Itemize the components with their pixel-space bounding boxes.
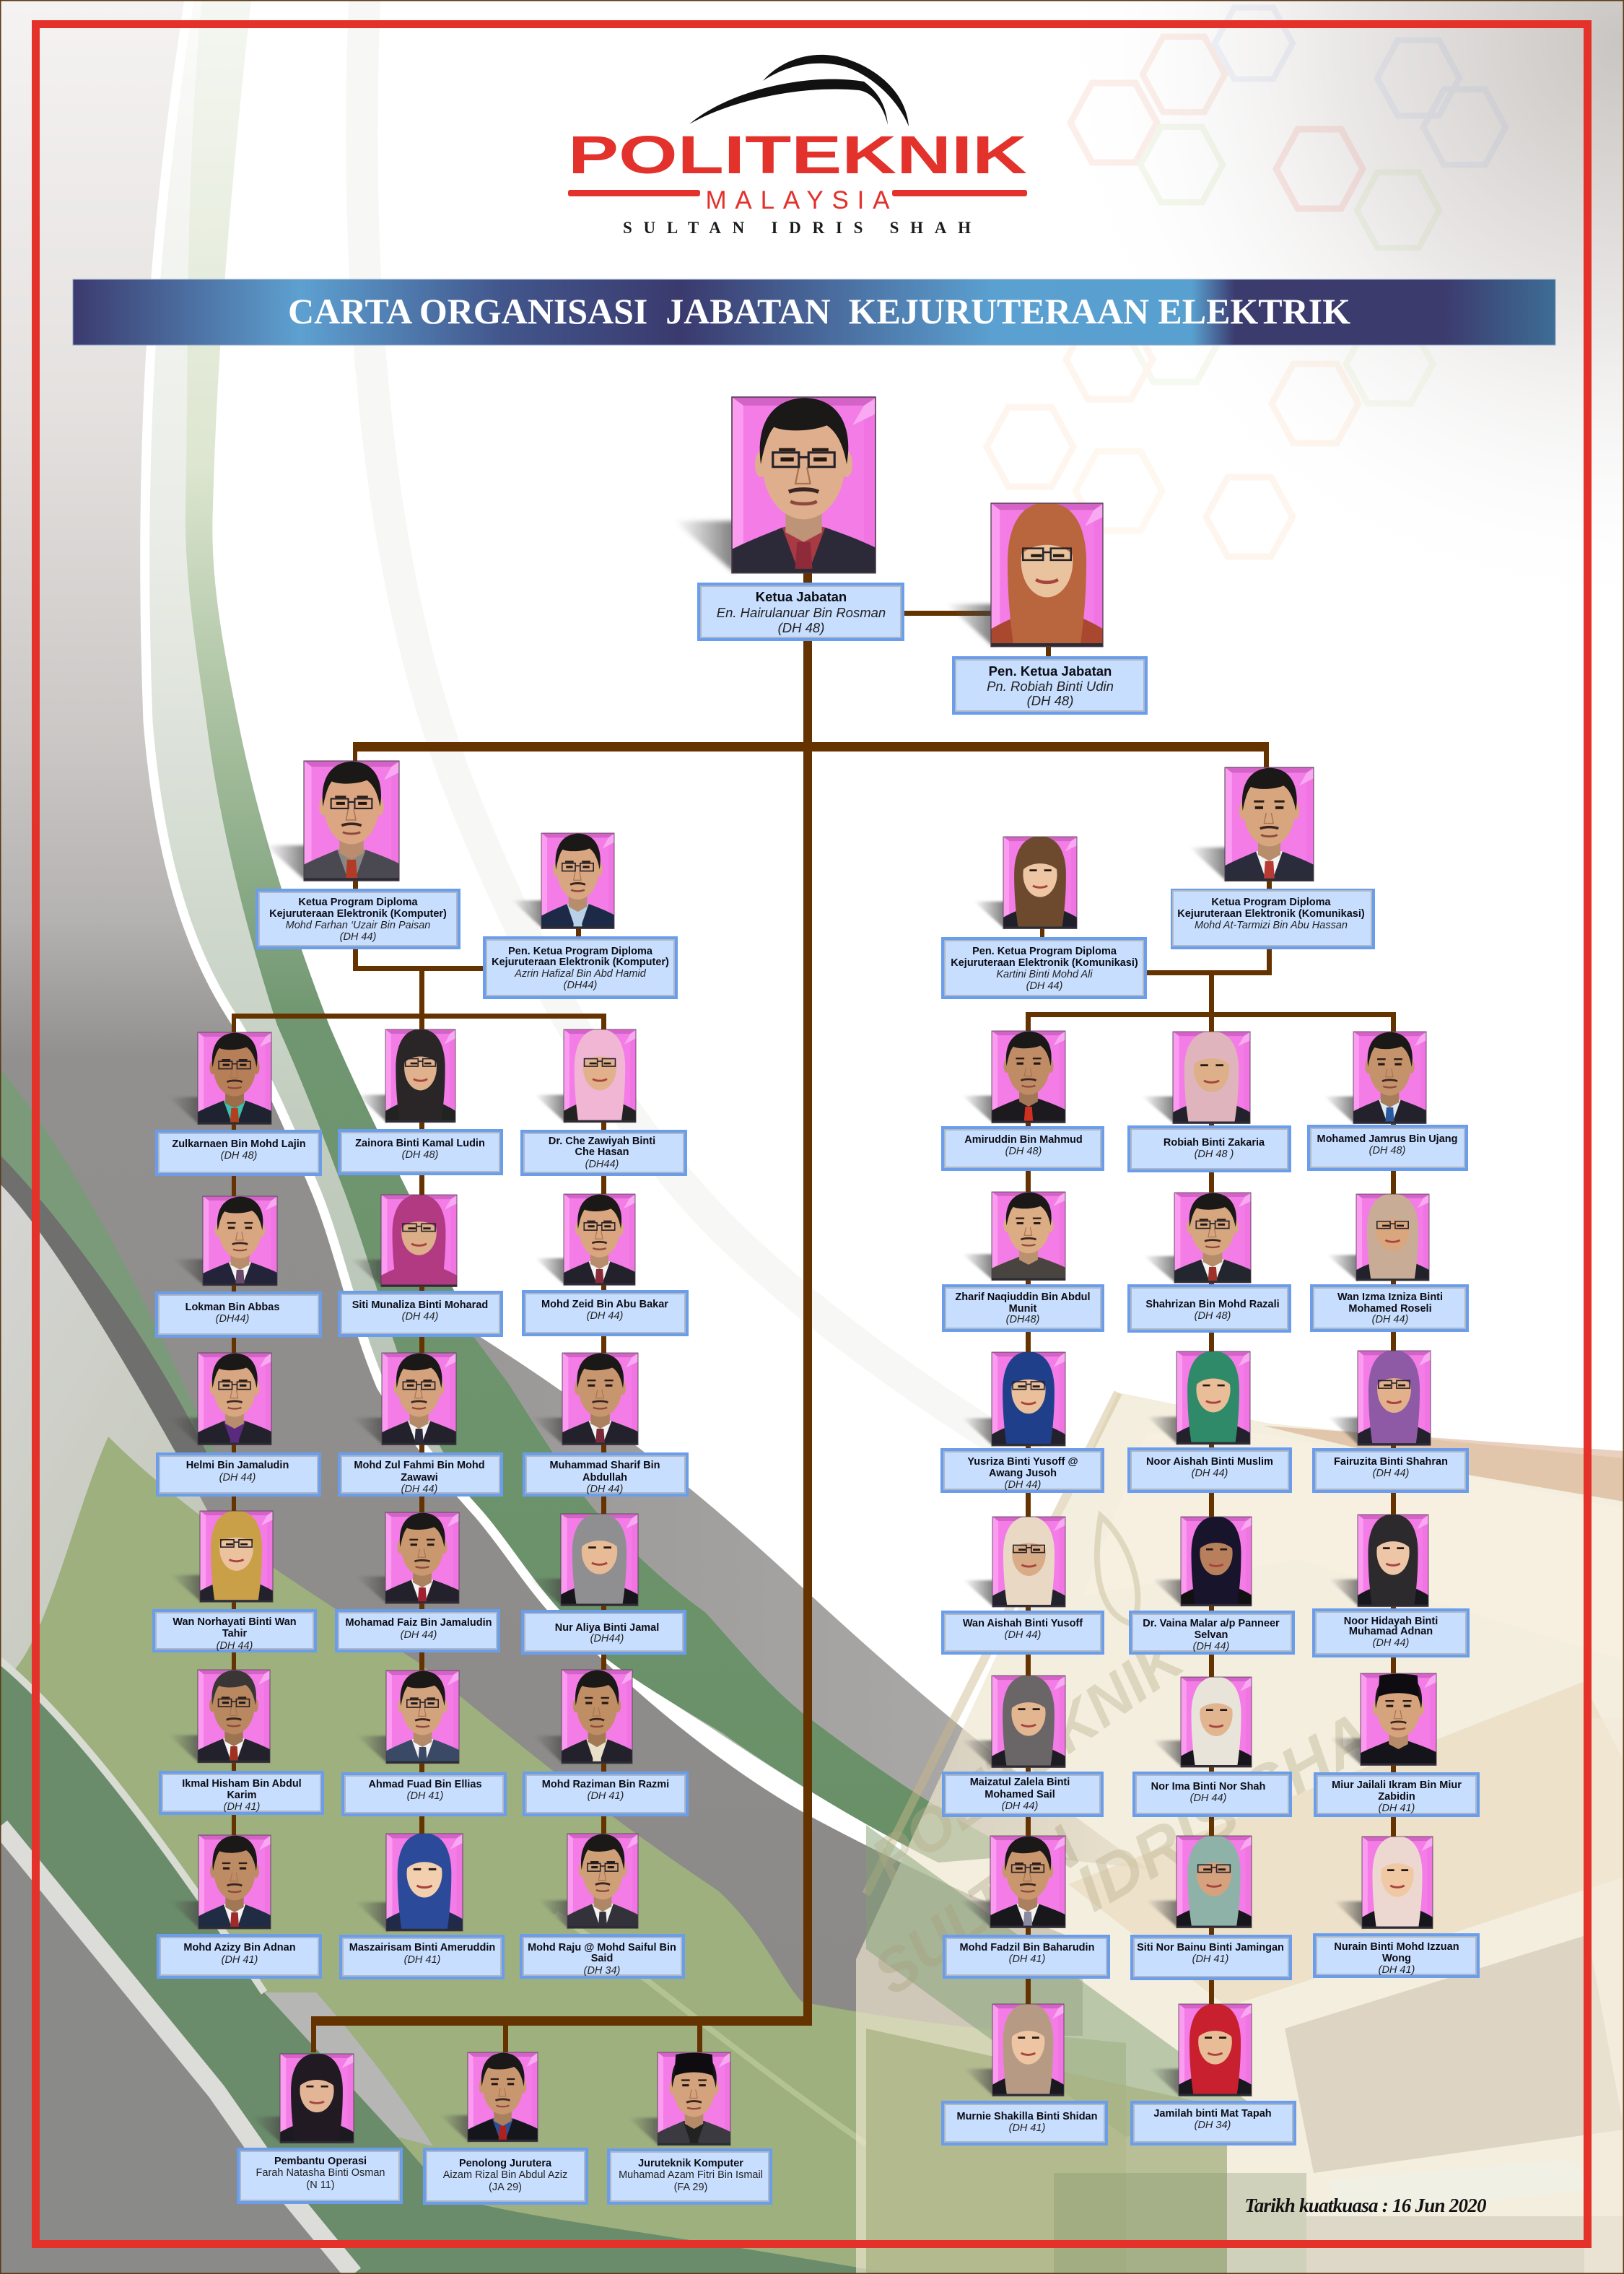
- name box: [1314, 1772, 1480, 1817]
- name box: Zharif Naqiuddin Bin Abdul: [955, 1291, 1091, 1303]
- name box: (DH 41): [1192, 1953, 1228, 1965]
- name box: Awang Jusoh: [989, 1468, 1057, 1479]
- card: Pembantu Operasi: [237, 2054, 403, 2204]
- name box: Ahmad Fuad Bin Ellias: [368, 1779, 482, 1790]
- card: Fairuzita: [1312, 1350, 1469, 1493]
- card: Juruteknik Komputer: [607, 2052, 772, 2205]
- name box: (DH 44): [1005, 1479, 1041, 1491]
- name box: (DH 44): [401, 1629, 437, 1641]
- photo: [169, 1670, 276, 1769]
- name box: (DH 41): [588, 1790, 624, 1802]
- name box: (DH 44): [1192, 1468, 1228, 1479]
- name box: Jamilah binti Mat Tapah: [1153, 2108, 1272, 2120]
- name box: Yusriza Binti Yusoff @: [967, 1456, 1078, 1468]
- name box: Abdullah: [582, 1472, 627, 1484]
- photo: [250, 2054, 357, 2148]
- card: Mohd Zeid: [522, 1194, 689, 1336]
- card: Shahrizan: [1127, 1193, 1291, 1333]
- name box: Nurain Binti Mohd Izzuan: [1334, 1941, 1459, 1953]
- name box: Muhamad Azam Fitri Bin Ismail: [619, 2169, 763, 2181]
- name box: Amiruddin Bin Mahmud: [964, 1134, 1083, 1146]
- name box: Siti Nor Bainu Binti Jamingan: [1137, 1942, 1284, 1953]
- name box: Muhammad Sharif Bin: [549, 1460, 660, 1471]
- photo: [1153, 1517, 1255, 1611]
- name box: Maizatul Zalela Binti: [970, 1777, 1070, 1788]
- name box: Zabidin: [1378, 1791, 1415, 1803]
- name box: Pen. Ketua Program Komunikasi: (DH 44): [1026, 980, 1062, 992]
- name box: [940, 1448, 1104, 1493]
- name box: Mohd Zeid Bin Abu Bakar: [541, 1299, 668, 1310]
- name box: [523, 1452, 689, 1497]
- card: Lokman: [155, 1196, 322, 1338]
- name box: (DH 48): [1369, 1145, 1405, 1156]
- card: Siti Nor Bainu: [1130, 1835, 1292, 1980]
- photo: [1146, 1835, 1255, 1933]
- photo: [168, 1032, 277, 1131]
- card: Muhammad Sharif: [523, 1353, 689, 1497]
- card: Maizatul: [942, 1675, 1104, 1817]
- name box: [1127, 1447, 1292, 1493]
- name box: [1313, 1933, 1480, 1978]
- name box: Noor Hidayah Binti: [1344, 1616, 1438, 1627]
- card: Vaina Malar: [1129, 1517, 1295, 1655]
- name box: (DH 41): [1009, 1953, 1045, 1965]
- name box: [1129, 1611, 1295, 1655]
- name box: Mohd Raju @ Mohd Saiful Bin: [528, 1942, 676, 1953]
- name box: (DH 41): [224, 1801, 260, 1813]
- card: Pen. Ketua Jabatan: [946, 502, 1148, 715]
- name box: [1310, 1284, 1469, 1332]
- photo: Hairulanuar: [674, 397, 886, 585]
- name box: (DH 41): [1379, 1803, 1415, 1814]
- title banner: CARTA ORGANISASI JABATAN KEJURUTERAAN ELEKTRIK: [288, 291, 1350, 331]
- name box: (DH 48): [402, 1149, 438, 1161]
- name box: Ketua Program Komputer: Ketua Program Diploma: [298, 897, 419, 908]
- name box: Helmi Bin Jamaludin: [186, 1460, 289, 1471]
- name box: [1127, 1125, 1291, 1172]
- name box: Pen. Ketua Program Komputer: [483, 936, 678, 999]
- card: Nur Aliya: [521, 1513, 686, 1655]
- name box: (DH44): [590, 1633, 624, 1644]
- name box: [521, 1610, 686, 1655]
- name box: Miur Jailali Ikram Bin Miur: [1332, 1779, 1462, 1791]
- name box: Pen. Ketua Program Komunikasi: Pen. Ketua Program Diploma: [972, 946, 1117, 957]
- photo: [1329, 1350, 1434, 1450]
- name box: Pen. Ketua Program Komputer: Azrin Hafizal Bin Abd Hamid: [514, 968, 647, 980]
- name box: [1130, 2101, 1296, 2146]
- logo: Politeknik Malaysia Sultan Idris Shah: SULTAN IDRIS SHAH: [623, 219, 971, 237]
- name box: (DH 44): [1193, 1641, 1229, 1652]
- name box: (DH 44): [1373, 1468, 1409, 1479]
- title banner: [73, 279, 1555, 345]
- name box: Pen. Ketua Program Komunikasi: Kartini Binti Mohd Ali: [996, 969, 1093, 980]
- name box: [423, 2148, 588, 2205]
- name box: [159, 1771, 324, 1815]
- photo: [168, 1353, 277, 1452]
- photo: [1324, 1032, 1432, 1131]
- photo: [357, 1670, 465, 1770]
- logo: Politeknik Malaysia Sultan Idris Shah: MALAYSIA: [706, 186, 890, 214]
- name box: (DH 44): [217, 1640, 253, 1652]
- name box: (DH 41): [404, 1954, 440, 1966]
- name box: (DH 48 ): [1195, 1149, 1234, 1160]
- name box: Mohamed Jamrus Bin Ujang: [1317, 1133, 1457, 1145]
- name box: Ketua Jabatan: En. Hairulanuar Bin Rosman: [717, 605, 886, 620]
- name box: Ketua Program Komputer: Mohd Farhan ‘Uzair Bin Paisan: [286, 920, 430, 931]
- name box: Fairuzita Binti Shahran: [1334, 1456, 1448, 1468]
- name box: [1132, 1772, 1292, 1817]
- photo: [962, 1675, 1069, 1772]
- name box: [943, 1935, 1110, 1979]
- photo: [173, 1196, 283, 1292]
- name box: [1312, 1448, 1469, 1493]
- name box: [942, 1772, 1104, 1817]
- card: Nurain: [1313, 1836, 1480, 1978]
- photo: [535, 1029, 639, 1127]
- name box: Wan Aishah Binti Yusoff: [963, 1618, 1083, 1629]
- name box: Lokman Bin Abbas: [185, 1302, 279, 1313]
- card: Pen. Ketua Program Komunikasi: [941, 836, 1147, 999]
- photo: Mohd At-Tarmizi: [1189, 767, 1320, 889]
- faint building sign text: POLITEKNIK: [859, 1621, 1199, 1894]
- name box: Nur Aliya Binti Jamal: [555, 1622, 659, 1634]
- photo: [1150, 2003, 1255, 2101]
- name box: Ketua Program Komputer: (DH 44): [340, 931, 376, 943]
- photo: Mohd Farhan: [266, 761, 406, 889]
- name box: Ketua Program Komunikasi: Kejuruteraan Elektronik (Komunikasi): [1177, 908, 1365, 920]
- name box: [941, 2101, 1108, 2146]
- name box: [335, 1609, 500, 1652]
- name box: [942, 1284, 1104, 1332]
- name box: Pen. Ketua Jabatan: Pen. Ketua Jabatan: [989, 663, 1112, 679]
- name box: Pen. Ketua Program Komputer: (DH44): [564, 980, 597, 991]
- name box: [341, 1772, 507, 1816]
- name box: Karim: [227, 1790, 257, 1801]
- photo: [1153, 1676, 1255, 1772]
- name box: Ketua Jabatan: (DH 48): [778, 620, 824, 635]
- card: Ketua Jabatan: [674, 397, 904, 641]
- name box: Farah Natasha Binti Osman: [256, 2167, 385, 2179]
- faint building sign text: SULTAN: [861, 1813, 1093, 2008]
- name box: Pen. Ketua Program Komputer: Pen. Ketua Program Diploma: [508, 946, 653, 957]
- card: Ahmad Fuad: [341, 1670, 507, 1816]
- card: Miur Jailali: [1314, 1673, 1480, 1817]
- name box: [157, 1934, 322, 1979]
- photo: [1147, 1351, 1254, 1449]
- name box: [523, 1772, 689, 1816]
- photo: [962, 1031, 1071, 1130]
- name box: Pembantu Operasi: [274, 2156, 367, 2167]
- photo: [170, 1835, 276, 1935]
- name box: Muhamad Adnan: [1349, 1626, 1433, 1637]
- name box: Mohd Azizy Bin Adnan: [183, 1942, 296, 1953]
- logo: Politeknik Malaysia Sultan Idris Shah: [568, 55, 1027, 237]
- name box: (DH 44): [401, 1484, 437, 1495]
- name box: Ketua Program Komputer: Kejuruteraan Elektronik (Komputer): [269, 908, 447, 920]
- name box: Pen. Ketua Jabatan: (DH 48): [1027, 693, 1073, 708]
- photo: Kartini: [974, 836, 1081, 933]
- card: Mohd Azizy: [157, 1835, 322, 1979]
- card: Yusriza: [940, 1351, 1104, 1493]
- logo: Politeknik Malaysia Sultan Idris Shah: POLITEKNIK: [568, 125, 1027, 185]
- card: Ketua Program Komputer: [256, 761, 460, 949]
- name box: Wan Izma Izniza Binti: [1337, 1291, 1443, 1303]
- name box: Zawawi: [401, 1472, 438, 1484]
- card: Wan Izma: [1310, 1194, 1469, 1332]
- card: Mohamad Faiz: [335, 1512, 500, 1652]
- card: Mohd Raju: [520, 1834, 685, 1979]
- card: Zulkarnaen: [155, 1032, 322, 1176]
- name box: [1312, 1608, 1470, 1657]
- name box: Ketua Program Komunikasi: [1171, 889, 1375, 949]
- faint building sign text: [859, 1621, 1427, 2008]
- photo: [629, 2052, 736, 2152]
- name box: [237, 2148, 403, 2204]
- name box: Che Hasan: [575, 1146, 629, 1158]
- name box: [520, 1934, 685, 1979]
- card: Siti Munaliza: [338, 1194, 503, 1337]
- card: Murnie: [941, 2003, 1108, 2146]
- card: Noor Hidayah: [1312, 1514, 1470, 1657]
- name box: [941, 1611, 1104, 1655]
- name box: (DH 48): [221, 1150, 257, 1162]
- card: Noor Aishah: [1127, 1351, 1292, 1493]
- card: Zainora: [338, 1029, 503, 1175]
- photo: Azrin Hafizal: [512, 833, 620, 936]
- card: Penolong Jurutera: [423, 2052, 588, 2205]
- name box: Dr. Vaina Malar a/p Panneer: [1143, 1618, 1280, 1629]
- name box: Mohd Raziman Bin Razmi: [542, 1779, 669, 1790]
- name box: Murnie Shakilla Binti Shidan: [957, 2111, 1097, 2122]
- name box: Mohamed Roseli: [1348, 1303, 1432, 1315]
- name box: Wong: [1382, 1953, 1411, 1964]
- name box: Robiah Binti Zakaria: [1164, 1137, 1265, 1149]
- photo: [171, 1510, 276, 1607]
- name box: Ketua Program Komunikasi: Mohd At-Tarmizi Bin Abu Hassan: [1195, 920, 1348, 931]
- name box: Ikmal Hisham Bin Abdul: [182, 1778, 302, 1790]
- name box: (DH 44): [1005, 1629, 1041, 1641]
- name box: (DH 44): [1373, 1637, 1409, 1649]
- name box: Pen. Ketua Program Komputer: Kejuruteraan Elektronik (Komputer): [492, 957, 669, 968]
- card: Nor Ima: [1132, 1676, 1292, 1817]
- name box: Wan Norhayati Binti Wan: [173, 1616, 297, 1628]
- photo: [1334, 1836, 1436, 1933]
- card: Che Zawiyah: [520, 1029, 687, 1176]
- photo: [530, 1513, 642, 1611]
- name box: [1307, 1125, 1468, 1171]
- card: Ikmal Hisham: [159, 1670, 324, 1815]
- name box: Zainora Binti Kamal Ludin: [355, 1138, 485, 1149]
- name box: Siti Munaliza Binti Moharad: [352, 1299, 488, 1311]
- name box: [522, 1290, 689, 1336]
- photo: [1330, 1673, 1442, 1772]
- connector lines: [232, 570, 1396, 2053]
- name box: Ketua Jabatan: [697, 583, 904, 641]
- name box: Pen. Ketua Program Komunikasi: Kejuruteraan Elektronik (Komunikasi): [951, 957, 1138, 969]
- name box: Ketua Jabatan: Ketua Jabatan: [756, 589, 847, 604]
- card: Mohd Raziman: [523, 1670, 689, 1816]
- name box: (DH 48): [1195, 1310, 1231, 1322]
- photo: [356, 1512, 465, 1610]
- name box: (FA 29): [674, 2182, 707, 2193]
- name box: Ketua Program Komunikasi: Ketua Program Diploma: [1211, 897, 1332, 908]
- photo: [539, 1834, 643, 1935]
- effective date: Tarikh kuatkuasa : 16 Jun 2020: [1244, 2195, 1487, 2216]
- card: Ketua Program Komunikasi: [1171, 767, 1375, 949]
- name box: Mohamed Sail: [985, 1789, 1055, 1800]
- name box: (DH 44): [587, 1310, 623, 1322]
- photo: [1144, 1193, 1257, 1289]
- name box: (DH 44): [1372, 1314, 1408, 1325]
- card: Jamilah: [1130, 2003, 1296, 2146]
- name box: (DH48): [1006, 1314, 1039, 1325]
- photo: [357, 1029, 459, 1127]
- name box: Mohd Zul Fahmi Bin Mohd: [354, 1460, 485, 1471]
- name box: (DH44): [585, 1159, 619, 1170]
- card: Wan Norhayati: [152, 1510, 317, 1652]
- photo: [535, 1194, 640, 1291]
- card: Mohd Fadzil: [943, 1836, 1110, 1979]
- name box: [338, 1129, 503, 1175]
- name box: (JA 29): [489, 2182, 522, 2193]
- photo: [960, 1836, 1071, 1935]
- name box: Maszairisam Binti Ameruddin: [349, 1942, 495, 1953]
- name box: [339, 1935, 505, 1979]
- name box: [155, 1291, 322, 1338]
- photo: [1142, 1031, 1254, 1128]
- name box: (DH 34): [1195, 2120, 1231, 2131]
- name box: [1127, 1284, 1291, 1333]
- name box: (DH 44): [1002, 1800, 1038, 1812]
- name box: Pen. Ketua Program Komunikasi: [941, 937, 1147, 999]
- name box: [156, 1452, 321, 1497]
- name box: Mohamad Faiz Bin Jamaludin: [345, 1617, 492, 1629]
- name box: (N 11): [306, 2179, 335, 2191]
- name box: [155, 1130, 322, 1176]
- name box: Mohd Fadzil Bin Baharudin: [960, 1942, 1094, 1953]
- card: Mohamed Jamrus: [1307, 1032, 1468, 1171]
- name box: (DH 44): [587, 1484, 623, 1495]
- name box: (DH 44): [219, 1472, 256, 1484]
- photo: [356, 1833, 466, 1936]
- name box: [941, 1126, 1104, 1171]
- name box: [338, 1291, 503, 1337]
- photo: [962, 1192, 1071, 1286]
- name box: [338, 1452, 503, 1497]
- photo: [1330, 1514, 1432, 1611]
- name box: (DH44): [216, 1313, 249, 1325]
- name box: Tahir: [222, 1628, 248, 1639]
- card: Amiruddin: [941, 1031, 1104, 1171]
- photo: [440, 2052, 543, 2148]
- name box: Ketua Program Komputer: [256, 889, 460, 949]
- card: Zharif: [942, 1192, 1104, 1332]
- card: Robiah Zakaria: [1127, 1031, 1291, 1172]
- name box: (DH 41): [1379, 1964, 1415, 1976]
- card: Pen. Ketua Program Komputer: [483, 833, 678, 999]
- photo: [962, 1351, 1069, 1451]
- name box: (DH 41): [407, 1790, 443, 1802]
- name box: (DH 44): [402, 1311, 438, 1323]
- card: Mohd Zul Fahmi: [338, 1353, 503, 1497]
- name box: (DH 41): [1009, 2122, 1045, 2134]
- name box: Dr. Che Zawiyah Binti: [549, 1136, 655, 1147]
- photo: [964, 1516, 1069, 1611]
- name box: Said: [591, 1953, 613, 1964]
- name box: (DH 41): [222, 1954, 258, 1966]
- photo: [1327, 1194, 1433, 1285]
- card: Maszairisam: [339, 1833, 505, 1979]
- name box: [152, 1609, 317, 1652]
- name box: Selvan: [1195, 1629, 1228, 1641]
- name box: Juruteknik Komputer: [638, 2158, 743, 2169]
- photo: [964, 2003, 1068, 2101]
- name box: Pen. Ketua Jabatan: Pn. Robiah Binti Udin: [987, 679, 1114, 694]
- card: Wan Aishah: [941, 1516, 1104, 1655]
- card: Helmi: [156, 1353, 321, 1497]
- photo: [352, 1353, 462, 1452]
- name box: Noor Aishah Binti Muslim: [1146, 1456, 1273, 1468]
- photo: [351, 1194, 460, 1291]
- name box: Munit: [1009, 1303, 1036, 1315]
- name box: [520, 1130, 687, 1176]
- name box: [607, 2148, 772, 2205]
- name box: Pen. Ketua Jabatan: [952, 656, 1148, 715]
- name box: Penolong Jurutera: [459, 2158, 552, 2169]
- name box: Shahrizan Bin Mohd Razali: [1145, 1299, 1280, 1310]
- background hexagon pattern: [987, 7, 1506, 557]
- name box: [1130, 1935, 1292, 1980]
- name box: Zulkarnaen Bin Mohd Lajin: [172, 1138, 306, 1150]
- name box: (DH 44): [1190, 1792, 1226, 1804]
- photo: [533, 1670, 637, 1770]
- photo: Robiah Binti Udin: [946, 502, 1109, 654]
- name box: (DH 48): [1005, 1146, 1042, 1157]
- name box: Aizam Rizal Bin Abdul Aziz: [443, 2169, 567, 2181]
- name box: (DH 34): [584, 1965, 620, 1977]
- faint building sign text: IDRIS SHAH: [1065, 1675, 1427, 1925]
- name box: Nor Ima Binti Nor Shah: [1151, 1781, 1265, 1792]
- photo: [532, 1353, 644, 1452]
